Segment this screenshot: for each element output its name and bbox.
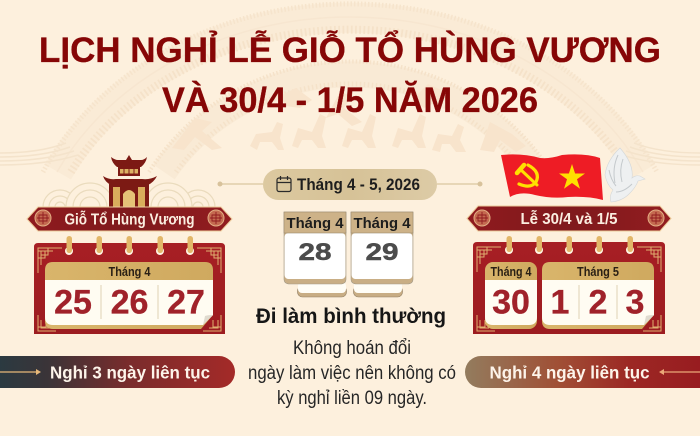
date sheet: May: Tháng 5 — [577, 264, 619, 279]
ribbon: Giỗ Tổ Hùng Vương: Giỗ Tổ Hùng Vương — [64, 210, 194, 228]
callout: 3 days off: Nghỉ 3 ngày liên tục — [50, 362, 210, 382]
date sheet — [45, 262, 213, 329]
date sheet: April — [485, 262, 537, 329]
title: VÀ 30/4 - 1/5 NĂM 2026 — [162, 80, 538, 120]
icon: medallion right — [208, 210, 224, 226]
panel: calendar right — [473, 236, 665, 334]
text block: explanation: kỳ nghỉ liền 09 ngày. — [277, 388, 427, 409]
callout: 3 days off — [0, 356, 235, 388]
arrow — [0, 369, 41, 375]
date sheet: May: 1 — [551, 284, 569, 322]
month pill with connector lines: Tháng 4 - 5, 2026 — [297, 176, 420, 194]
calendar: 29: Tháng 4 — [354, 216, 410, 232]
ribbon: Giỗ Tổ Hùng Vương — [27, 207, 232, 231]
icon: calendar — [277, 176, 291, 192]
icon: medallion left — [35, 210, 51, 226]
month pill with connector lines — [218, 169, 482, 200]
ribbon: Lễ 30/4 và 1/5 — [467, 206, 671, 231]
panel: calendar left — [34, 236, 225, 334]
ornate corners — [38, 248, 221, 331]
date sheet: 26 — [111, 284, 148, 322]
ornate corners — [477, 247, 661, 331]
calendar: 29: 29 — [366, 239, 398, 266]
bronze drum watermark — [0, 4, 700, 172]
date sheet: May — [542, 262, 654, 329]
text block: explanation: Không hoán đổi — [293, 338, 411, 359]
date sheet: Tháng 4 — [108, 264, 151, 279]
calendar: 29 — [351, 212, 413, 297]
icon: star — [559, 164, 585, 189]
calendar: 28 — [284, 212, 346, 297]
rings — [505, 236, 634, 254]
date sheet: 25 — [54, 284, 92, 322]
date sheet: April: Tháng 4 — [490, 264, 532, 279]
date sheet: May: 3 — [626, 284, 644, 322]
callout: 4 days off: Nghỉ 4 ngày liên tục — [490, 362, 650, 382]
date sheet: May: 2 — [589, 284, 607, 322]
ribbon: Lễ 30/4 và 1/5: Lễ 30/4 và 1/5 — [520, 209, 618, 228]
heading: normal work days: Đi làm bình thường — [256, 304, 446, 328]
icon: temple with waves — [43, 155, 215, 207]
arrow — [659, 369, 700, 375]
icon: dove — [605, 148, 645, 202]
calendar: 28: Tháng 4 — [286, 216, 344, 232]
text block: explanation: ngày làm việc nên không có — [248, 363, 456, 384]
calendar: 28: 28 — [298, 239, 332, 266]
icon: hammer and sickle — [517, 165, 537, 186]
title — [39, 30, 661, 120]
icon: Vietnamese flag and party flag — [501, 154, 603, 200]
birds and deer figures — [172, 84, 526, 152]
icon: medallion right — [648, 210, 664, 226]
date sheet: April: 30 — [492, 284, 530, 322]
date sheet: 27 — [167, 284, 205, 322]
title: LỊCH NGHỈ LỄ GIỖ TỔ HÙNG VƯƠNG — [39, 30, 661, 70]
callout: 4 days off — [465, 356, 700, 388]
icon: medallion left — [474, 210, 490, 226]
rings — [65, 236, 194, 255]
text block: explanation — [248, 338, 456, 409]
